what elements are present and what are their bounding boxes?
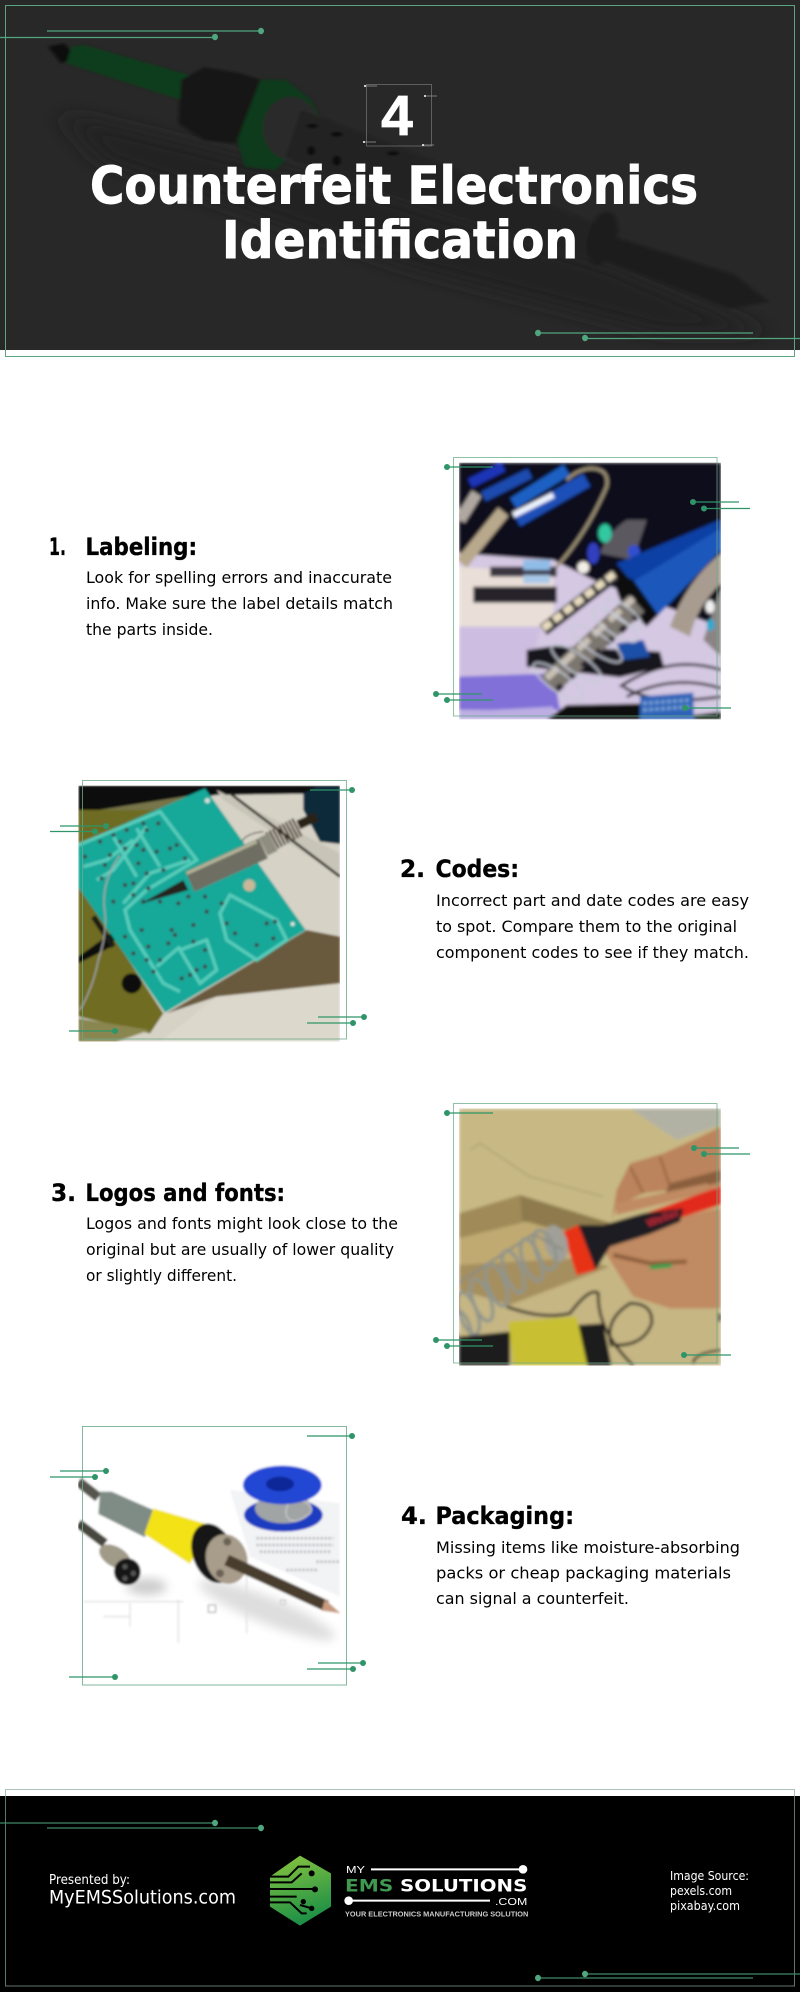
text block: packaging xyxy=(436,1538,740,1608)
text block: codes xyxy=(436,891,749,962)
number 4: 4 xyxy=(381,84,413,148)
text block: packaging: can signal a counterfeit. xyxy=(436,1589,629,1608)
heading: 1 labeling: Labeling: xyxy=(86,533,197,561)
photo 4 xyxy=(78,1464,340,1643)
image source xyxy=(670,1869,749,1913)
frame 1 xyxy=(454,458,717,716)
circuit lines 1 xyxy=(433,464,750,711)
header frame xyxy=(6,6,794,356)
presented by xyxy=(49,1873,236,1908)
heading: 3 logos and fonts: Logos and fonts: xyxy=(86,1179,285,1207)
photo 3: Weller xyxy=(645,1207,682,1230)
text block: codes: to spot. Compare them to the original xyxy=(436,917,737,936)
logo wordmark xyxy=(344,1865,528,1919)
photo 1 xyxy=(459,463,721,719)
heading: 4 packaging: Packaging: xyxy=(436,1502,574,1530)
photo panel 4: yellow soldering iron and solder spool xyxy=(50,1426,366,1685)
frame 4 xyxy=(82,1426,346,1685)
photo panel 1: blue soldering iron xyxy=(433,458,750,719)
presented by: Presented by: xyxy=(49,1873,130,1888)
photo 3 xyxy=(448,1108,721,1366)
heading: 2 codes: Codes: xyxy=(436,855,519,883)
photo panel 3: red soldering iron xyxy=(433,1104,750,1366)
number badge frame xyxy=(363,84,437,146)
heading: 2 codes xyxy=(400,855,519,883)
presented by: MyEMSSolutions.com xyxy=(49,1886,236,1908)
text block: packaging: Missing items like moisture-absorbing xyxy=(436,1538,740,1557)
logo hexagon icon xyxy=(270,1856,331,1926)
heading: 1 labeling xyxy=(49,533,197,561)
heading: 4 packaging: 4. xyxy=(401,1502,427,1530)
heading: 2 codes: 2. xyxy=(400,855,425,883)
text block: packaging: packs or cheap packaging materials xyxy=(436,1564,731,1582)
text block: codes: component codes to see if they match. xyxy=(436,943,749,962)
footer circuit lines xyxy=(0,1820,800,1981)
text block: codes: Incorrect part and date codes are easy xyxy=(436,891,749,910)
text block: labeling xyxy=(86,568,393,639)
header photo: soldering iron xyxy=(48,43,768,333)
logo wordmark: SOLUTIONS xyxy=(400,1877,527,1896)
frame 2 xyxy=(82,780,346,1039)
frame 3 xyxy=(454,1104,717,1363)
panel: 1 labeling text xyxy=(49,533,393,639)
circuit lines 4 xyxy=(50,1433,366,1680)
text block: labeling: info. Make sure the label details match xyxy=(86,594,393,613)
logo wordmark: MY xyxy=(346,1865,365,1876)
footer panel xyxy=(0,1790,800,1992)
title: Identification xyxy=(222,211,578,271)
photo panel 2: circuit board xyxy=(50,780,367,1042)
panel: 4 packaging text xyxy=(401,1502,740,1608)
text block: logos and fonts: Logos and fonts might look close to the xyxy=(86,1214,398,1233)
circuit lines 2 xyxy=(50,787,367,1034)
heading: 3 logos and fonts: 3. xyxy=(51,1179,76,1207)
image source: Image Source: xyxy=(670,1869,749,1883)
title xyxy=(90,156,698,271)
panel: 3 logos and fonts text xyxy=(51,1179,398,1285)
text block: labeling: the parts inside. xyxy=(86,620,213,639)
photo 2 xyxy=(78,786,340,1042)
header circuit lines xyxy=(0,28,800,341)
image source: pexels.com xyxy=(670,1884,732,1898)
heading: 1 labeling: 1. xyxy=(49,533,66,561)
text block: logos and fonts: or slightly different. xyxy=(86,1266,237,1285)
title: Counterfeit Electronics xyxy=(90,156,698,216)
circuit lines 3 xyxy=(433,1110,750,1358)
logo wordmark: .COM xyxy=(495,1897,527,1908)
panel: 2 codes text xyxy=(400,855,749,962)
logo wordmark: YOUR ELECTRONICS MANUFACTURING SOLUTION xyxy=(345,1910,528,1919)
logo xyxy=(270,1856,528,1926)
image source: pixabay.com xyxy=(670,1899,740,1913)
footer frame xyxy=(6,1790,794,1986)
text block: labeling: Look for spelling errors and inaccurate xyxy=(86,568,392,587)
header panel xyxy=(0,0,800,356)
text block: logos and fonts: original but are usually of lower quality xyxy=(86,1240,394,1259)
text block: logos and fonts xyxy=(86,1214,398,1285)
logo wordmark: EMS xyxy=(345,1877,393,1896)
